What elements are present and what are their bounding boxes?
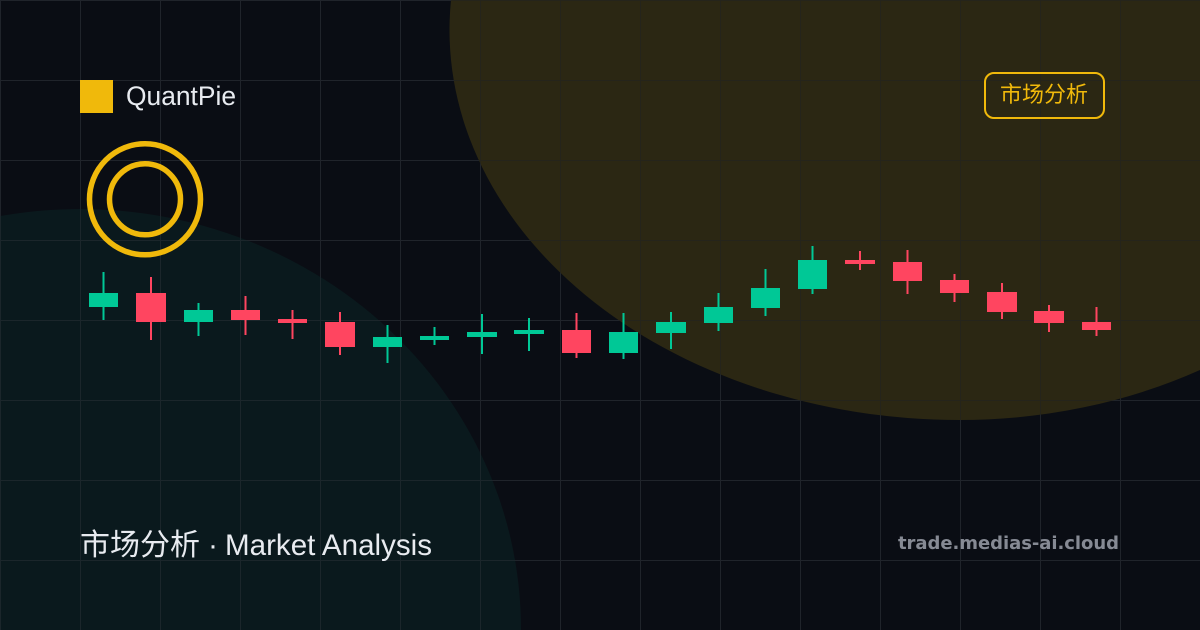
title: 市场分析 — [80, 529, 200, 562]
logo: brand mark and wordmark — [80, 80, 236, 113]
candle 12 — [609, 313, 638, 359]
tag: market analysis: 市场分析 — [1000, 82, 1088, 107]
candle 4 — [231, 296, 260, 335]
candle 8 — [420, 327, 449, 345]
candle 13 — [656, 312, 686, 349]
candle 16 — [798, 246, 827, 294]
candle 6 — [325, 312, 355, 355]
candle 15 — [751, 269, 780, 316]
candle 7 — [373, 325, 402, 363]
tag: market analysis — [985, 73, 1104, 118]
candle 19 — [940, 274, 969, 302]
candle 5 — [278, 310, 307, 339]
candle 20 — [987, 283, 1017, 319]
candle 18 — [893, 250, 922, 294]
candle 1 — [89, 272, 118, 320]
candlestick chart — [89, 246, 1111, 363]
icon: yellow logo square — [80, 80, 113, 113]
title: Market Analysis — [225, 529, 432, 562]
footer url: trade.medias-ai.cloud — [898, 533, 1119, 554]
candle 3 — [184, 303, 213, 336]
candle 11 — [562, 313, 591, 358]
candle 21 — [1034, 305, 1064, 332]
candle 9 — [467, 314, 497, 354]
candle 2 — [136, 277, 166, 340]
title: · — [208, 529, 218, 562]
candle 14 — [704, 293, 733, 331]
icon: concentric rings — [90, 144, 200, 255]
brand name: QuantPie — [126, 81, 236, 111]
candle 17 — [845, 251, 875, 270]
background blob: green — [0, 209, 521, 630]
candle 22 — [1082, 307, 1111, 336]
candle 10 — [514, 318, 544, 351]
background blob: yellow — [449, 0, 1200, 420]
